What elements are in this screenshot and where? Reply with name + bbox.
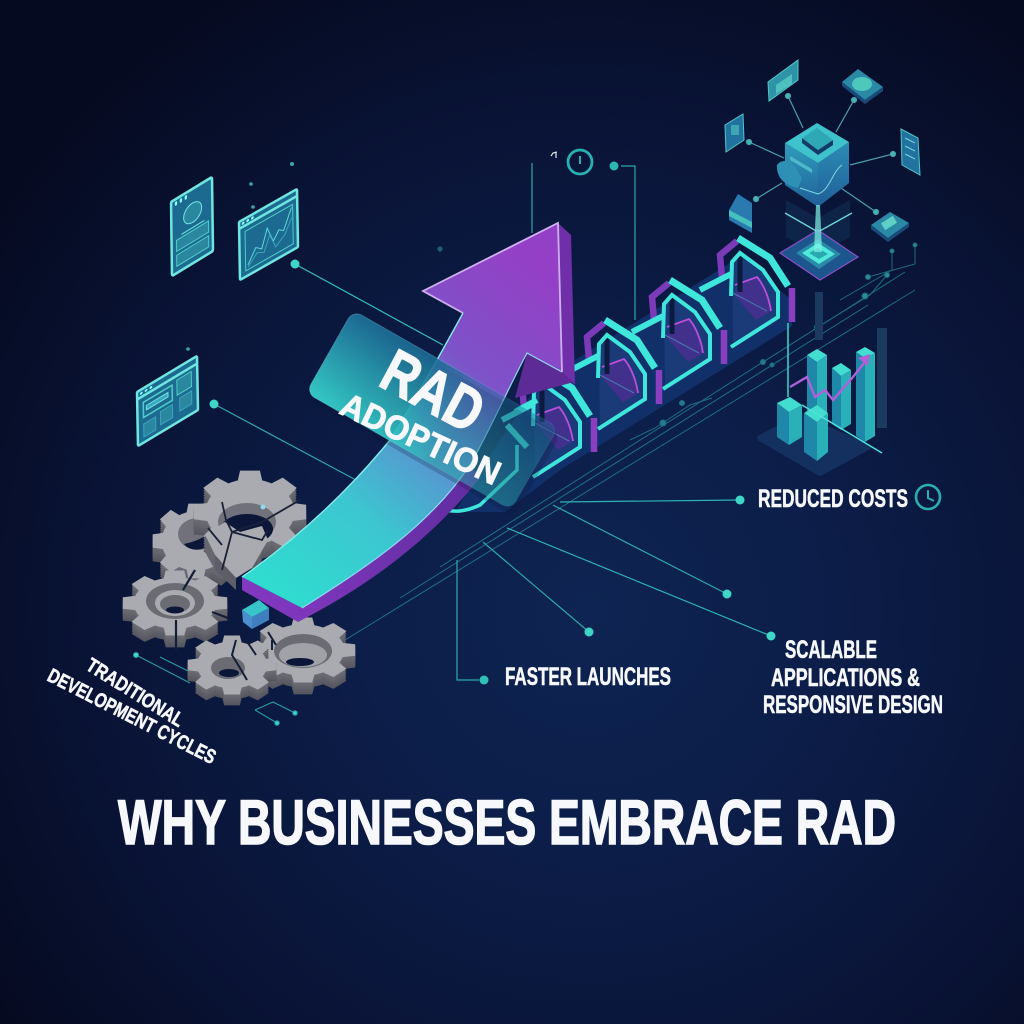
gear: lower centre — [188, 635, 276, 705]
small blue block — [242, 600, 269, 629]
gear: top — [194, 471, 306, 590]
pipeline gates — [445, 238, 792, 511]
ADOPTION: ADOPTION — [335, 386, 506, 493]
tunnel body — [455, 258, 792, 512]
RAD: RAD — [370, 336, 496, 446]
gear: lower right — [251, 617, 355, 694]
gate 4 — [700, 238, 792, 347]
icon: top clock with connectors — [532, 150, 635, 320]
label: traditional development cycles: TRADITIONAL — [82, 654, 188, 732]
icon: clock — [916, 485, 940, 509]
label: scalable applications and responsive design — [763, 636, 943, 719]
label: traditional development cycles: DEVELOPMENT CYCLES — [44, 665, 219, 769]
label: faster launches: FASTER LAUNCHES — [505, 663, 671, 691]
broken gears: traditional development cycles — [123, 471, 355, 725]
gate 1 — [502, 368, 594, 477]
light beam platform — [780, 205, 858, 280]
RAD adoption glass panel — [306, 310, 561, 517]
label: scalable applications and responsive design: SCALABLE — [785, 636, 877, 664]
connectors — [746, 94, 896, 214]
icon: profile tablet — [171, 177, 213, 276]
upper-left connector dots and lines — [186, 162, 443, 480]
circuit traces along the track — [345, 243, 917, 640]
label: scalable applications and responsive design: RESPONSIVE DESIGN — [763, 691, 943, 719]
callout lines: benefits — [457, 496, 776, 684]
satellite devices — [725, 60, 920, 242]
icon: dashboard browser window — [137, 356, 198, 446]
label: reduced costs: REDUCED COSTS — [758, 485, 908, 513]
gate 3 — [632, 280, 724, 389]
light column — [786, 200, 850, 255]
label: scalable applications and responsive design: APPLICATIONS & — [771, 664, 920, 692]
label: traditional development cycles — [44, 654, 219, 769]
cube — [777, 123, 849, 207]
circuit traces near gears — [134, 652, 297, 725]
growth arrow — [242, 223, 575, 622]
icon: chart browser window — [239, 189, 298, 280]
bar chart — [760, 292, 887, 473]
server hub — [725, 60, 920, 280]
gear: back left — [153, 504, 239, 592]
gear: middle left — [123, 570, 228, 650]
gate 2 — [567, 320, 659, 429]
